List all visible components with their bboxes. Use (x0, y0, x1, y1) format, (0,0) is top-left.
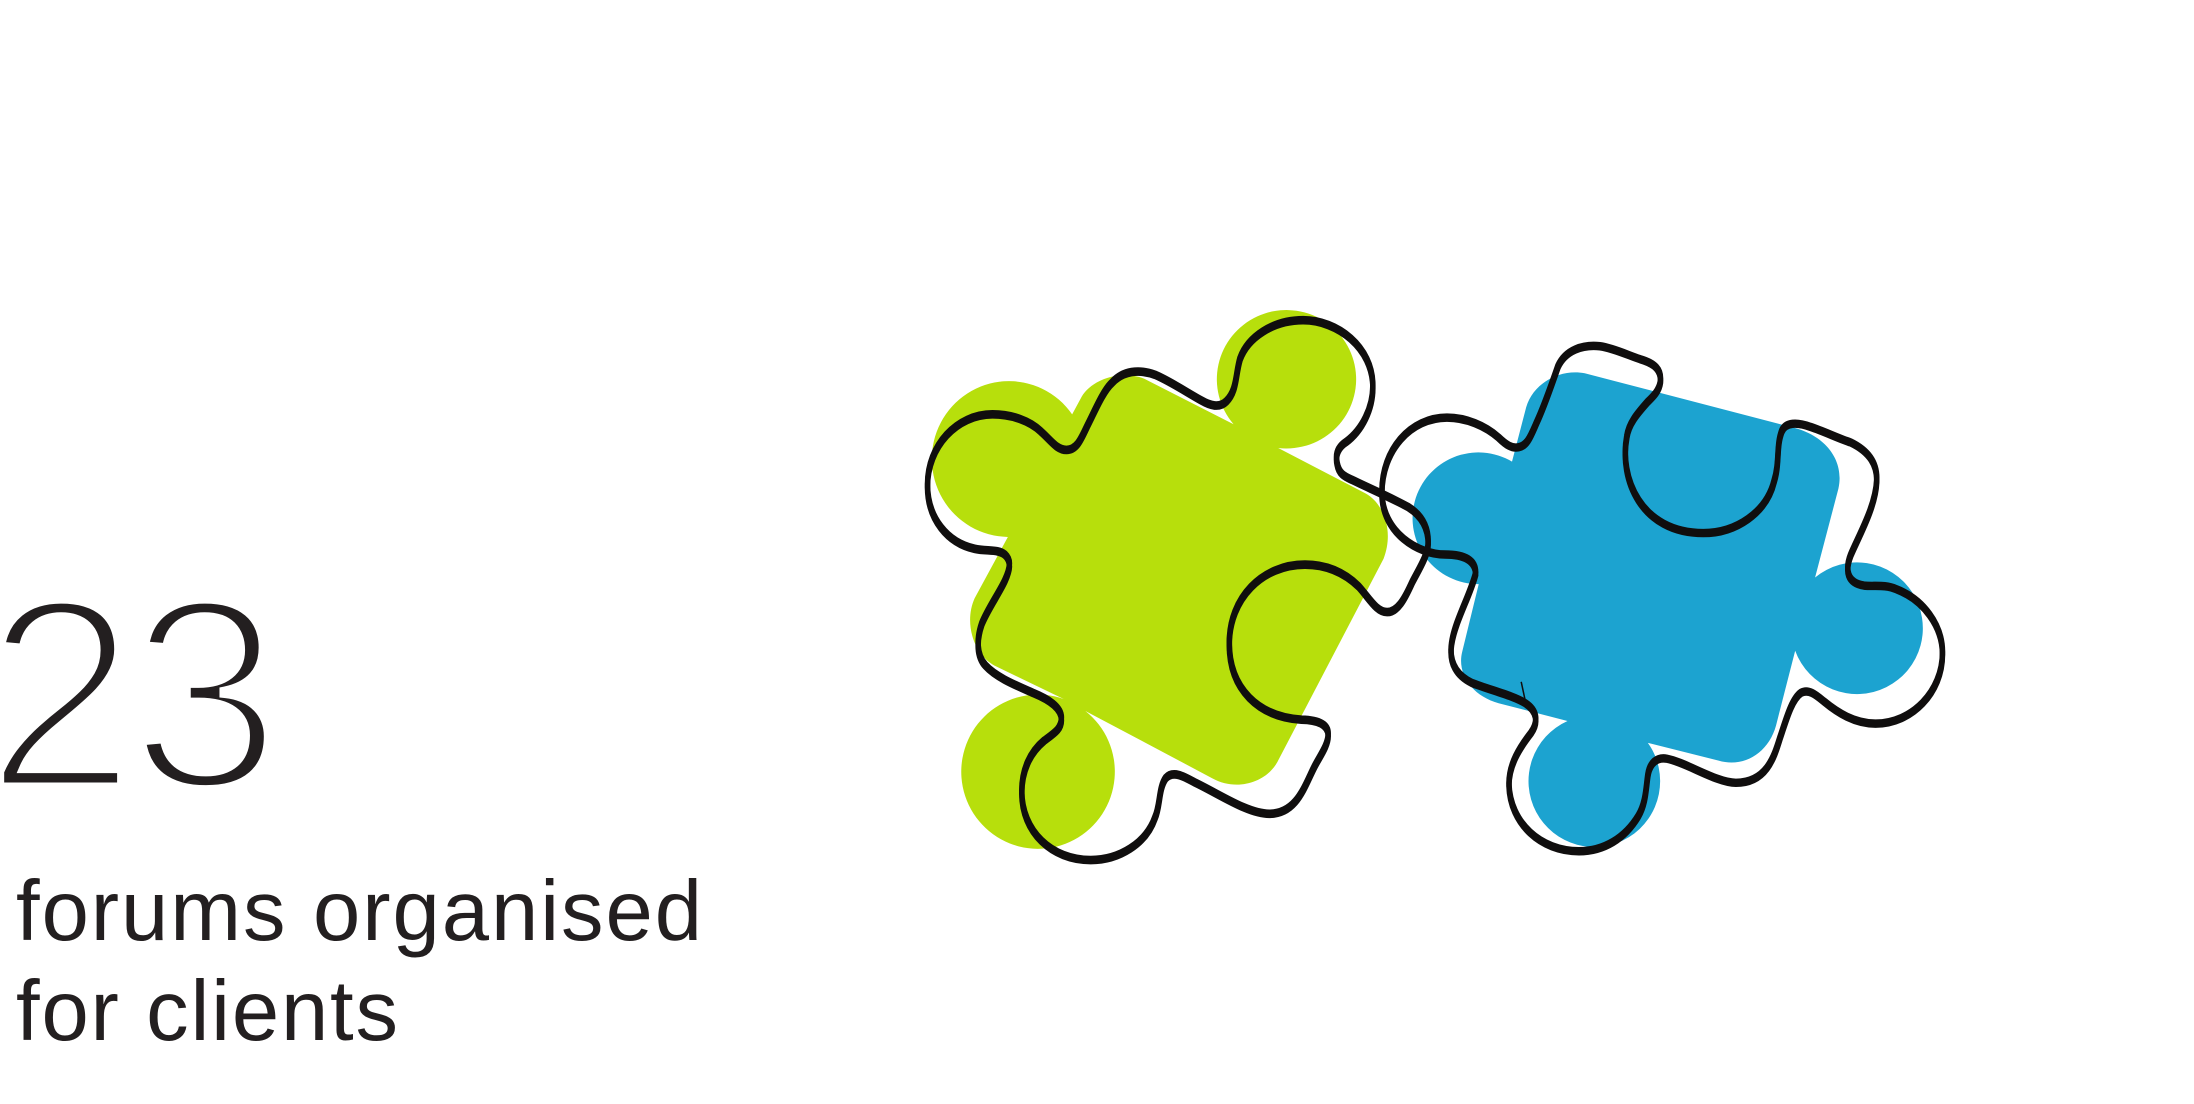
caption text (16, 864, 702, 1059)
caption text: forums organised (16, 864, 702, 959)
statistic number: 23: 3 (130, 542, 281, 846)
statistic number: 23 (0, 542, 281, 846)
green puzzle fill (932, 310, 1388, 849)
blue puzzle fill (1413, 372, 1923, 847)
blue puzzle outline (1382, 344, 1942, 853)
green puzzle outline (927, 319, 1428, 862)
caption text: for clients (16, 964, 398, 1059)
